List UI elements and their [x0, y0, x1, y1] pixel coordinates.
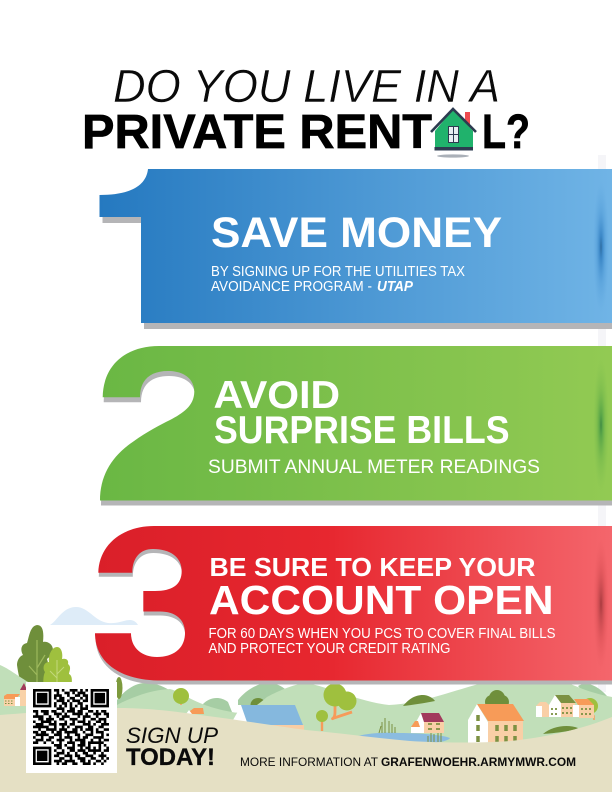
- numeral 1 band: [100, 169, 612, 323]
- body text: AND PROTECT YOUR CREDIT RATING: [208, 641, 450, 657]
- body text: SUBMIT ANNUAL METER READINGS: [208, 456, 540, 478]
- footer: more information: [240, 757, 576, 769]
- heading: [214, 374, 510, 452]
- call to action: SIGN UP: [126, 723, 218, 748]
- pond: [354, 733, 450, 745]
- tree: small lime: [173, 688, 189, 705]
- fold strip: [598, 155, 606, 692]
- title line 1: DO YOU LIVE IN A: [113, 60, 500, 112]
- icon: house replacing letter A: [431, 109, 476, 158]
- tree: small, by QR: [116, 677, 122, 699]
- QR code: [26, 682, 117, 773]
- numeral 3 band: [95, 526, 612, 680]
- call to action: TODAY!: [126, 744, 215, 771]
- house: maroon roof: [411, 713, 444, 733]
- heading: [209, 554, 554, 623]
- cloud: [50, 607, 138, 625]
- bush behind hills: [250, 698, 266, 712]
- ground: [0, 708, 612, 792]
- reeds: [379, 718, 441, 742]
- panel: 3 keep your account open: [95, 526, 612, 684]
- left village: [4, 683, 27, 706]
- footer: more information: MORE INFORMATION AT: [240, 757, 378, 769]
- heading: SAVE MONEY: [211, 209, 502, 257]
- tree: lime: [43, 647, 72, 690]
- panel shadow: [96, 549, 612, 684]
- bush lower right: [543, 726, 578, 734]
- panel: 2 avoid surprise bills: [100, 346, 612, 506]
- numeral 2 band: [100, 346, 612, 500]
- panel shadow: [101, 371, 612, 506]
- house: small orange: [186, 708, 204, 714]
- footer: more information: GRAFENWOEHR.ARMYMWR.COM: [381, 757, 576, 769]
- title line 2: PRIVATE RENT: [82, 105, 432, 159]
- back hills: [117, 683, 607, 712]
- body text: FOR 60 DAYS WHEN YOU PCS TO COVER FINAL BILLS: [208, 626, 556, 642]
- fold shading: [593, 359, 609, 491]
- bush right: [403, 695, 435, 706]
- panel shadow: [102, 217, 612, 329]
- fold shading: [593, 538, 609, 670]
- fold shading: [593, 181, 609, 313]
- body text: UTAP: [377, 279, 413, 295]
- heading: BE SURE TO KEEP YOUR: [210, 554, 536, 582]
- heading: SURPRISE BILLS: [214, 409, 510, 452]
- title: [82, 60, 530, 159]
- bush behind big house: [485, 690, 509, 709]
- heading: ACCOUNT OPEN: [209, 577, 554, 623]
- tree: olive: [17, 625, 53, 690]
- title line 2: L?: [482, 105, 530, 159]
- body text: BY SIGNING UP FOR THE UTILITIES TAX: [211, 264, 465, 280]
- house: big orange roof: [468, 704, 524, 745]
- right village: [536, 695, 598, 720]
- call to action: [126, 723, 218, 771]
- panel: 1 save money: [100, 169, 612, 329]
- heading: AVOID: [214, 374, 340, 417]
- house: blue roof: [233, 705, 304, 732]
- body text: [208, 626, 556, 657]
- body text: [211, 264, 465, 295]
- main hills: [0, 665, 612, 745]
- tree: big lime pair: [316, 684, 356, 731]
- body text: AVOIDANCE PROGRAM -: [211, 279, 372, 295]
